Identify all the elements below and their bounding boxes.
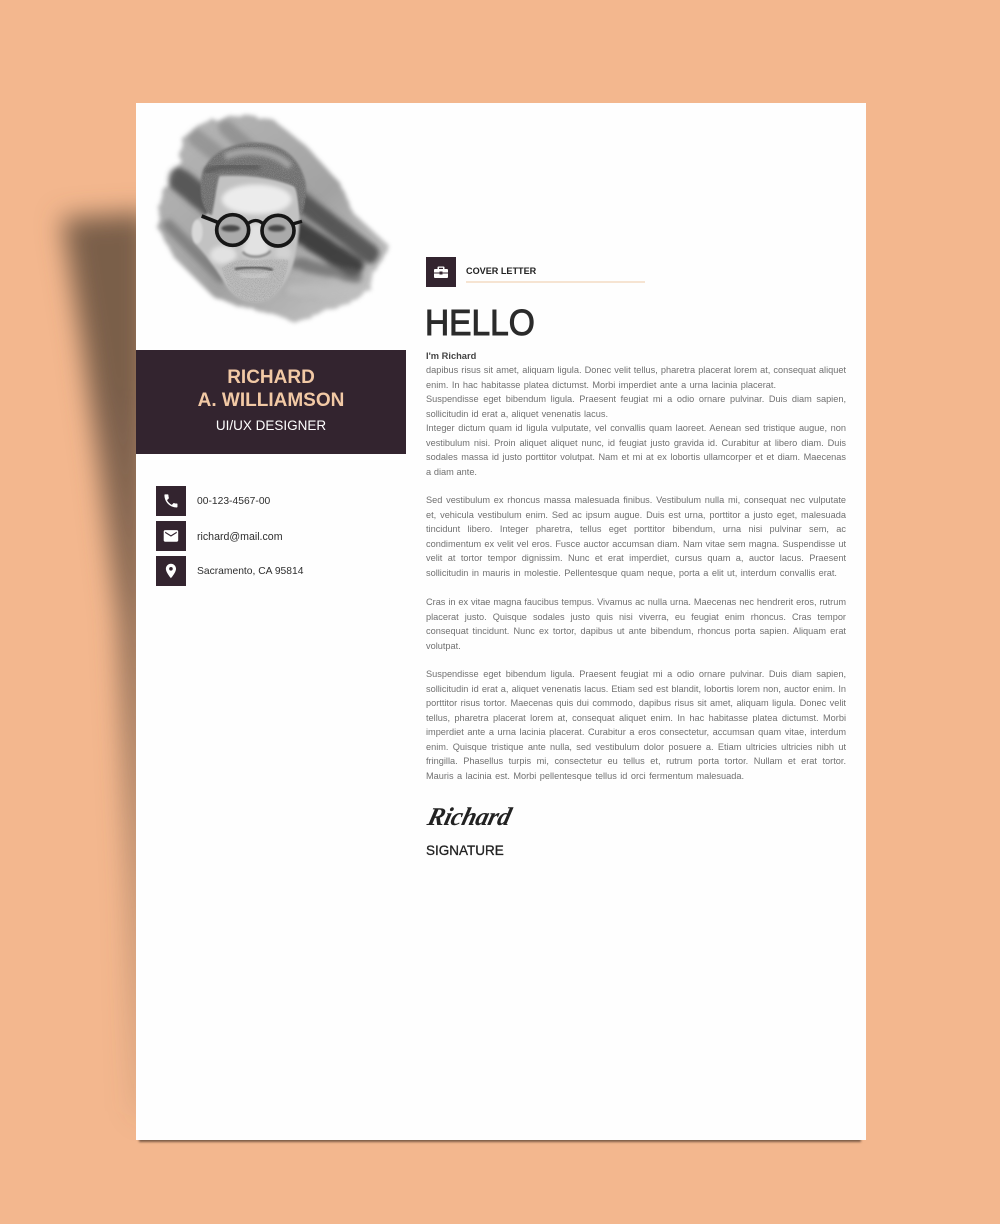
panel: resume page [136,103,866,1140]
paragraph 4: imperdiet ante a urna lacinia placerat. Curabitur a eros consectetur, accumsan quam vitae, interdum [426,727,846,737]
name: RICHARD [227,367,315,388]
paragraph 1: a diam ante. [426,466,477,476]
job title: UI/UX DESIGNER [216,418,326,433]
paragraph 3: placerat justo. Quisque sodales justo quis nisi viverra, eu feugiat enim rhoncus. Cras tempor [426,612,846,622]
paragraph 2: velit at tortor tempor dignissim. Nunc et erat imperdiet, cursus quam a, auctor lacus. Praesent [426,553,846,563]
paragraph 2: Sed vestibulum ex rhoncus massa malesuada finibus. Vestibulum nulla mi, consequat nec vulputate [426,495,846,505]
glasses [202,215,302,246]
name: A. WILLIAMSON [198,390,344,411]
paragraph 4: sollicitudin id erat a, aliquet venenatis lacus. Etiam sed est blandit, lobortis lorem non, auctor enim. In [426,684,846,694]
paragraph 1: Integer dictum quam id ligula vulputate, vel convallis quam laoreet. Aenean sed tristique augue, non [426,423,846,433]
beard [222,259,288,302]
paragraph 4: enim. Quisque tristique ante nulla, sed vestibulum dolor posuere a. Etiam ultricies ultricies nibh ut [426,742,846,752]
icon: briefcase [426,257,456,287]
paragraph 1: vestibulum nisi. Proin aliquet aliquet nunc, id feugiat justo gravida id. Curabitur at libero diam. Duis [426,438,846,448]
paragraph 4 [426,669,846,781]
name banner [136,350,406,454]
intro name: I'm Richard [426,351,476,361]
signature label: SIGNATURE [426,843,504,858]
paragraph 1: enim. In hac habitasse platea dictumst. Morbi imperdiet ante a urna lacinia placerat. [426,380,776,390]
paragraph 2: tincidunt libero. Integer pharetra, tellus eget porttitor bibendum, urna nisi pulvinar sem, ac [426,524,846,534]
section title: COVER LETTER [466,266,536,276]
address: Sacramento, CA 95814 [197,566,303,577]
icon: phone [156,486,186,516]
handwritten signature: Richard [425,802,514,831]
paragraph 4: tellus, pharetra placerat lorem at, consequat aliquet enim. In hac habitasse platea dictumst. Morbi [426,712,846,722]
hair [201,143,306,217]
paragraph 4: Mauris a lacinia est. Morbi pellentesque tellus id orci fermentum malesuada. [426,770,744,780]
nose and mouth [242,223,271,258]
portrait [155,112,390,324]
paragraph 3: Cras in ex vitae magna faucibus tempus. Vivamus ac nulla urna. Maecenas nec hendrerit eros, rutrum [426,597,846,607]
paragraph 3: volutpat. [426,640,461,650]
phone number: 00-123-4567-00 [197,496,270,507]
paragraph 3 [426,597,846,651]
contact list [156,486,304,586]
paragraph 2 [426,495,846,578]
underline [466,281,645,283]
paragraph 4: fringilla. Phasellus turpis mi, consectetur eu tellus et, rutrum porta tortor. Nullam et erat tortor. [426,756,846,766]
icon: location pin [156,556,186,586]
paragraph 1: dapibus risus sit amet, aliquam ligula. Donec velit tellus, pharetra placerat lorem at, consequat aliquet [426,365,846,375]
greeting heading: HELLO [425,302,535,343]
email: richard@mail.com [197,531,283,543]
icon: envelope [156,521,186,551]
paragraph 2: sollicitudin in mauris in molestie. Pellentesque quam neque, porta a elit ut, interdum convallis erat. [426,568,837,578]
paragraph 1: sodales massa id justo porttitor volutpat. Nam et mi at ex lobortis ullamcorper et et diam. Maecenas [426,452,846,462]
face [192,176,300,301]
paragraph 1 [426,365,846,476]
paragraph 3: consequat tincidunt. Nunc ex tortor, dapibus ut ante bibendum, rhoncus porta sapien. Aliquam erat [426,626,846,636]
paragraph 4: Suspendisse eget bibendum ligula. Praesent feugiat mi a odio ornare pulvinar. Duis diam sapien, [426,669,846,679]
brush strokes [158,114,390,323]
name [198,367,344,411]
paragraph 1: Suspendisse eget bibendum ligula. Praesent feugiat mi a odio ornare pulvinar. Duis diam sapien, [426,394,846,404]
cover letter heading [426,257,645,287]
paragraph 2: et, vehicula vestibulum enim. Sed ac ipsum augue. Duis est urna, porttitor a justo eget, malesuada [426,510,846,520]
paragraph 1: sollicitudin id erat a, aliquet venenatis lacus. [426,408,608,418]
paragraph 2: condimentum ex velit vel eros. Fusce auctor accumsan diam. Nam vitae sem magna. Suspendisse ut [426,538,846,548]
paragraph 4: porttitor risus tortor. Maecenas quis dui commodo, dapibus risus sit amet, aliquam ligula. Donec velit [426,698,846,708]
